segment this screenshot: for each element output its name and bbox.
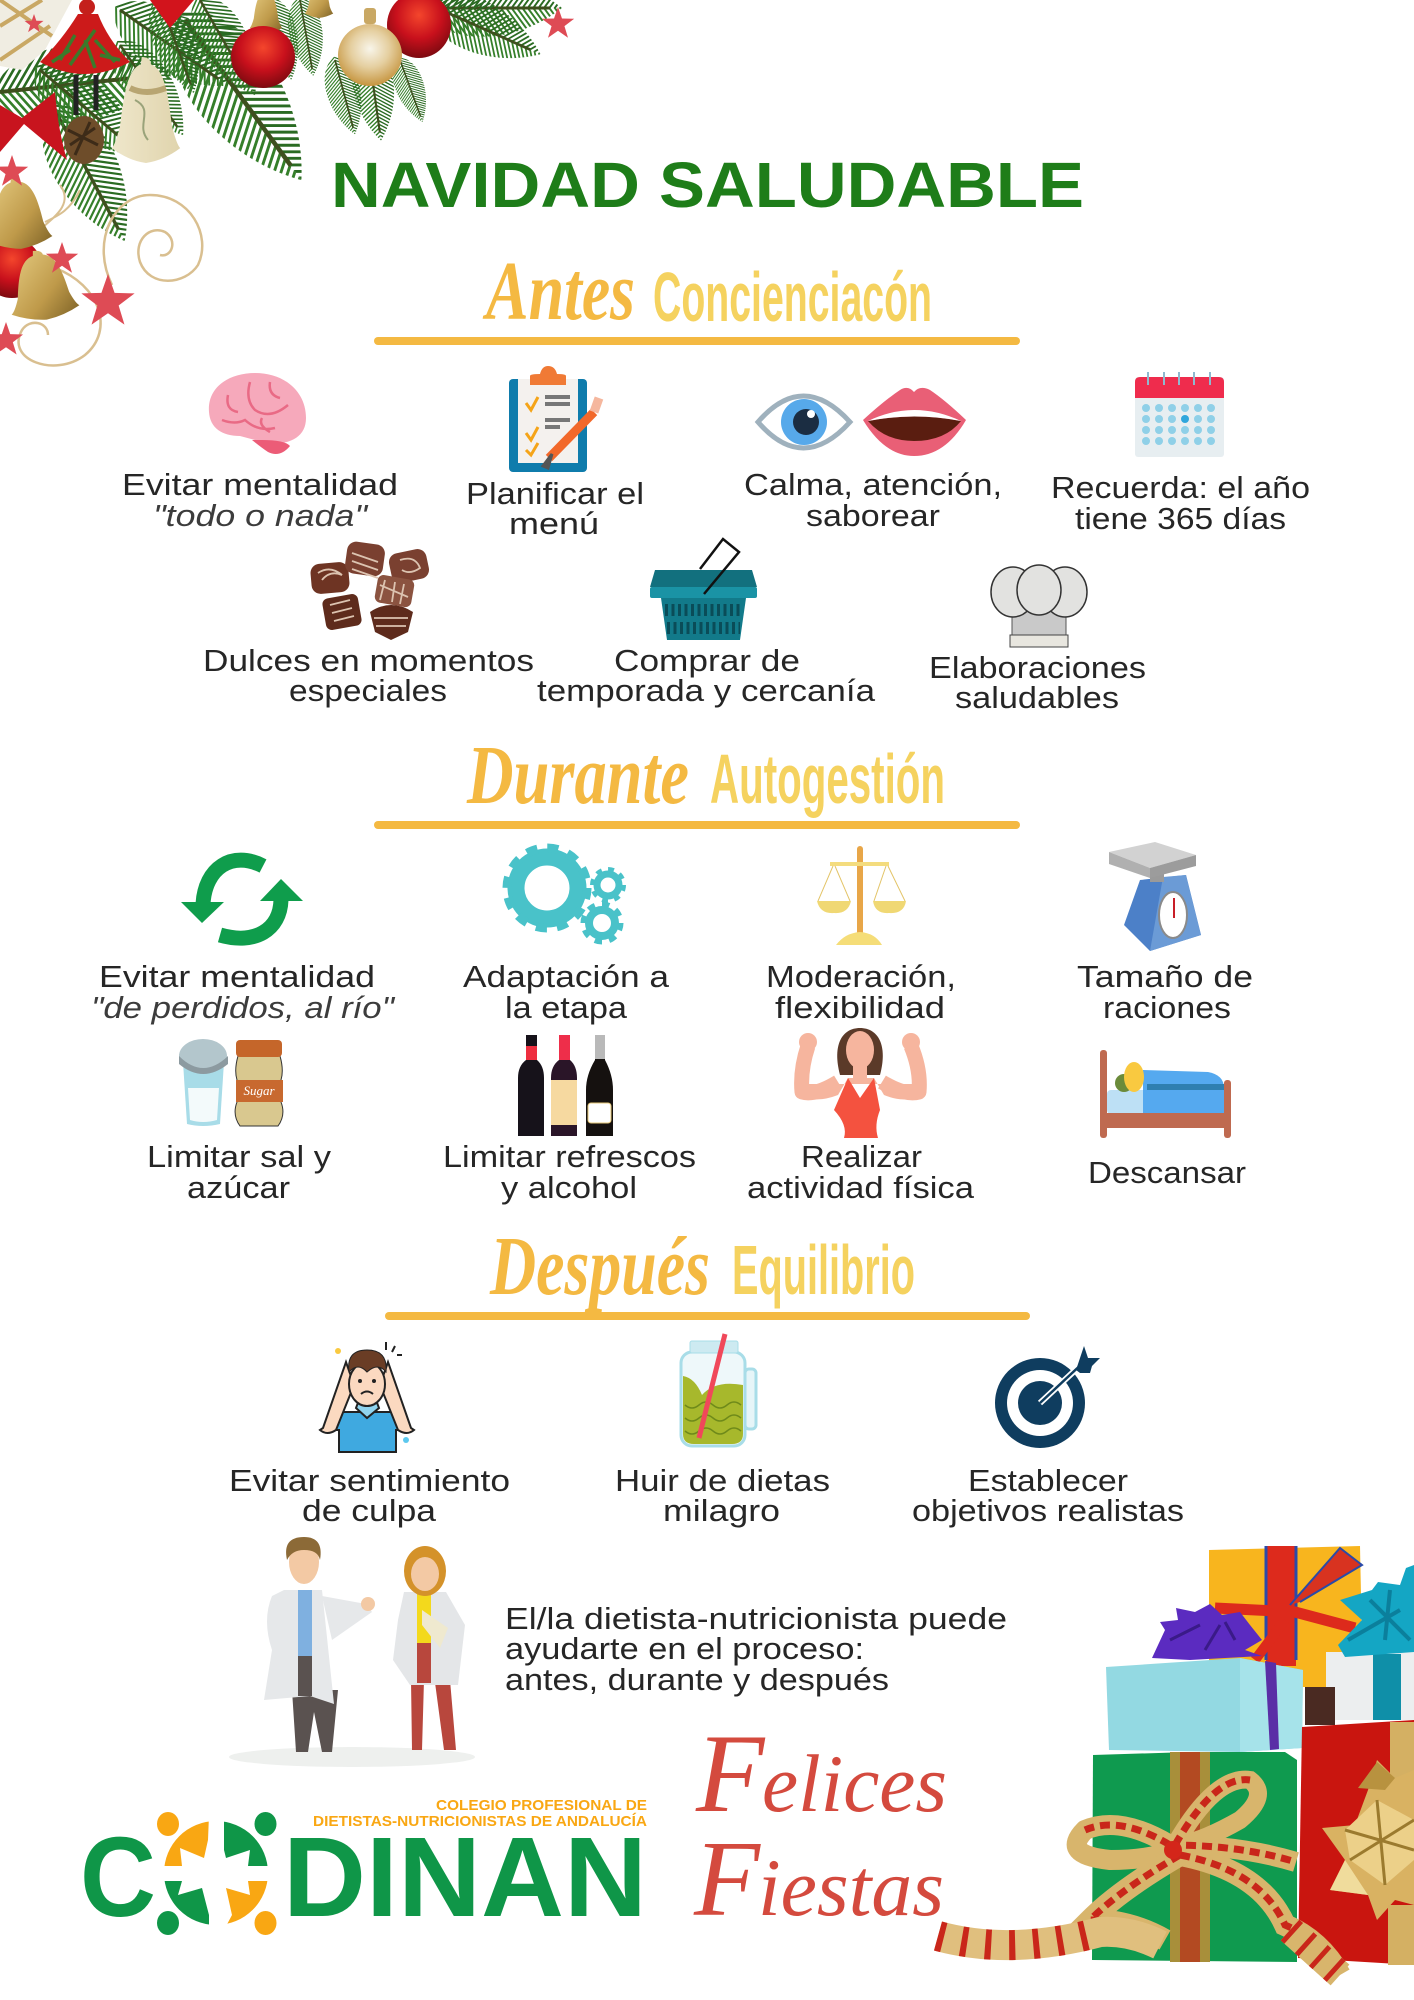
logo tagline (313, 1797, 647, 1830)
heading: despues: Equilibrio (732, 1231, 915, 1309)
illustration: dietitians (229, 1537, 475, 1767)
left red bow (0, 92, 67, 160)
greeting: felices fiestas: F (693, 1820, 761, 1939)
label: azúcar (187, 1170, 290, 1205)
logo: codinan (80, 1797, 647, 1940)
heading: antes: Antes (482, 245, 635, 338)
label: Evitar mentalidad (122, 467, 398, 502)
panel: antes (122, 245, 1310, 715)
item: brain (122, 373, 398, 533)
label (229, 1463, 510, 1528)
gift: green (1092, 1752, 1297, 1962)
label (122, 467, 398, 533)
logo letters DINAN: DINAN (283, 1814, 647, 1940)
gold bells and red ball (0, 238, 42, 298)
label: saborear (806, 498, 940, 533)
label: Moderación, (766, 959, 956, 994)
icon: clipboard (509, 366, 599, 472)
icon: calendar (1135, 372, 1224, 457)
icon: salt and sugar jars (179, 1039, 283, 1126)
top red bow (150, 0, 194, 28)
label (766, 959, 956, 1025)
label: Limitar sal y (147, 1139, 332, 1174)
label: Elaboraciones (929, 650, 1146, 685)
greeting: felices fiestas (693, 1712, 947, 1939)
label: y alcohol (501, 1170, 637, 1205)
label (747, 1139, 975, 1205)
label (203, 643, 534, 708)
doll dress (40, 14, 130, 74)
text block: dietitian message: antes, durante y después (505, 1662, 889, 1697)
label: Limitar refrescos (443, 1139, 696, 1174)
label: objetivos realistas (912, 1493, 1184, 1528)
label: de culpa (302, 1493, 437, 1528)
icon: woman flexing (796, 1028, 925, 1138)
decoration: christmas garland top-left (0, 0, 611, 365)
panel: despues (229, 1220, 1184, 1528)
logo tagline: DIETISTAS-NUTRICIONISTAS DE ANDALUCÍA (313, 1813, 647, 1830)
label (91, 959, 396, 1025)
cookie corner (0, 0, 72, 70)
label: "todo o nada" (153, 498, 369, 533)
logo emblem (157, 1812, 276, 1935)
label (537, 643, 876, 708)
heading: durante: Durante (466, 729, 689, 822)
item: diets (615, 1334, 830, 1528)
logo tagline: COLEGIO PROFESIONAL DE (436, 1797, 647, 1814)
label: Tamaño de (1077, 959, 1253, 994)
label: Huir de dietas (615, 1463, 830, 1498)
label (929, 650, 1146, 715)
label (463, 959, 670, 1025)
gift: red (1298, 1720, 1414, 1965)
label: Evitar sentimiento (229, 1463, 510, 1498)
icon: balance scale (817, 849, 906, 945)
icon: brain (209, 373, 306, 454)
label: Adaptación a (463, 959, 670, 994)
greeting: felices fiestas: F (695, 1712, 766, 1836)
icon: gears (507, 848, 624, 942)
item: calendar (1051, 372, 1310, 536)
label: Establecer (968, 1463, 1128, 1498)
label: Comprar de (614, 643, 800, 678)
label: Evitar mentalidad (99, 959, 375, 994)
icon: lips (863, 388, 966, 456)
label: Recuerda: el año (1051, 470, 1310, 505)
bow: cyan (1338, 1565, 1414, 1657)
label: raciones (1103, 990, 1231, 1025)
heading: antes (374, 245, 1020, 345)
pearl ball (338, 24, 402, 86)
label: Planificar el (466, 476, 644, 511)
label: Calma, atención, (744, 467, 1002, 502)
red stars (542, 7, 574, 38)
icon: salt and sugar jars: Sugar (243, 1083, 275, 1098)
red ball 2 (387, 0, 451, 58)
label (912, 1463, 1184, 1528)
icon: bottles (518, 1035, 613, 1136)
text block: dietitian message (505, 1601, 1007, 1697)
icon: kitchen scale (1109, 842, 1201, 951)
item: chef hat (929, 565, 1146, 715)
pinecone (64, 116, 104, 164)
item: goals (912, 1346, 1184, 1528)
label: Dulces en momentos (203, 643, 534, 678)
gift: white (1305, 1652, 1414, 1725)
item: exercise (747, 1028, 975, 1205)
bow: purple (1152, 1604, 1262, 1660)
red ball 1 (231, 26, 295, 88)
label: tiene 365 días (1075, 501, 1286, 536)
label (147, 1139, 332, 1205)
gift: yellow (1209, 1546, 1362, 1687)
label (1077, 959, 1253, 1025)
panel: durante (91, 729, 1253, 1205)
item: basket (537, 539, 876, 708)
label (1051, 470, 1310, 536)
greeting: felices fiestas: elices (762, 1738, 947, 1829)
bow: gold (1322, 1760, 1414, 1965)
icon: target (995, 1346, 1100, 1448)
cream bell (112, 57, 180, 163)
icon: chef hat (991, 565, 1087, 647)
label: "de perdidos, al río" (91, 990, 396, 1025)
item: menu (466, 366, 644, 541)
heading: durante: Autogestión (710, 740, 945, 818)
title: NAVIDAD SALUDABLE (331, 149, 1084, 221)
item: gears (463, 848, 670, 1025)
icon: chocolates (310, 541, 431, 640)
label: Realizar (801, 1139, 922, 1174)
label: menú (509, 506, 599, 541)
label: Descansar (1088, 1155, 1246, 1190)
icon: bed (1100, 1050, 1231, 1138)
item: bottles (443, 1035, 696, 1205)
heading: antes: Concienciacón (653, 258, 932, 336)
text block: dietitian message: ayudarte en el proceso: (505, 1631, 864, 1666)
item: arrows (91, 860, 396, 1025)
heading: despues (385, 1220, 1030, 1320)
icon: cycle arrows (181, 860, 303, 938)
icon: eye (758, 396, 850, 448)
label (615, 1463, 830, 1528)
label: saludables (955, 680, 1119, 715)
swirls (104, 195, 202, 285)
heading: despues: Después (489, 1220, 710, 1313)
ribbon: gold and red bow (938, 1780, 1340, 1975)
gift: light blue (1106, 1658, 1303, 1752)
item: calma (744, 388, 1002, 533)
label: temporada y cercanía (537, 673, 876, 708)
decoration: gift boxes (938, 1546, 1414, 1975)
item: sweets (203, 541, 534, 708)
logo letter C: C (80, 1814, 156, 1940)
bells top (250, 0, 282, 34)
icon: worried man (320, 1342, 414, 1452)
icon: basket (650, 539, 757, 640)
item: weighing scale (1077, 842, 1253, 1025)
item: salt and sugar (147, 1039, 332, 1205)
icon: juice jar (681, 1334, 756, 1446)
item: balance (766, 849, 956, 1025)
heading: durante (374, 729, 1020, 829)
label: milagro (663, 1493, 780, 1528)
label: actividad física (747, 1170, 975, 1205)
item: bed (1088, 1050, 1246, 1190)
label (466, 476, 644, 541)
greeting: felices fiestas: iestas (758, 1842, 944, 1933)
label (744, 467, 1002, 533)
text block: dietitian message: El/la dietista-nutricionista puede (505, 1601, 1007, 1636)
label: especiales (289, 673, 447, 708)
label (443, 1139, 696, 1205)
label: flexibilidad (775, 990, 945, 1025)
label: la etapa (505, 990, 628, 1025)
item: guilt (229, 1342, 510, 1528)
